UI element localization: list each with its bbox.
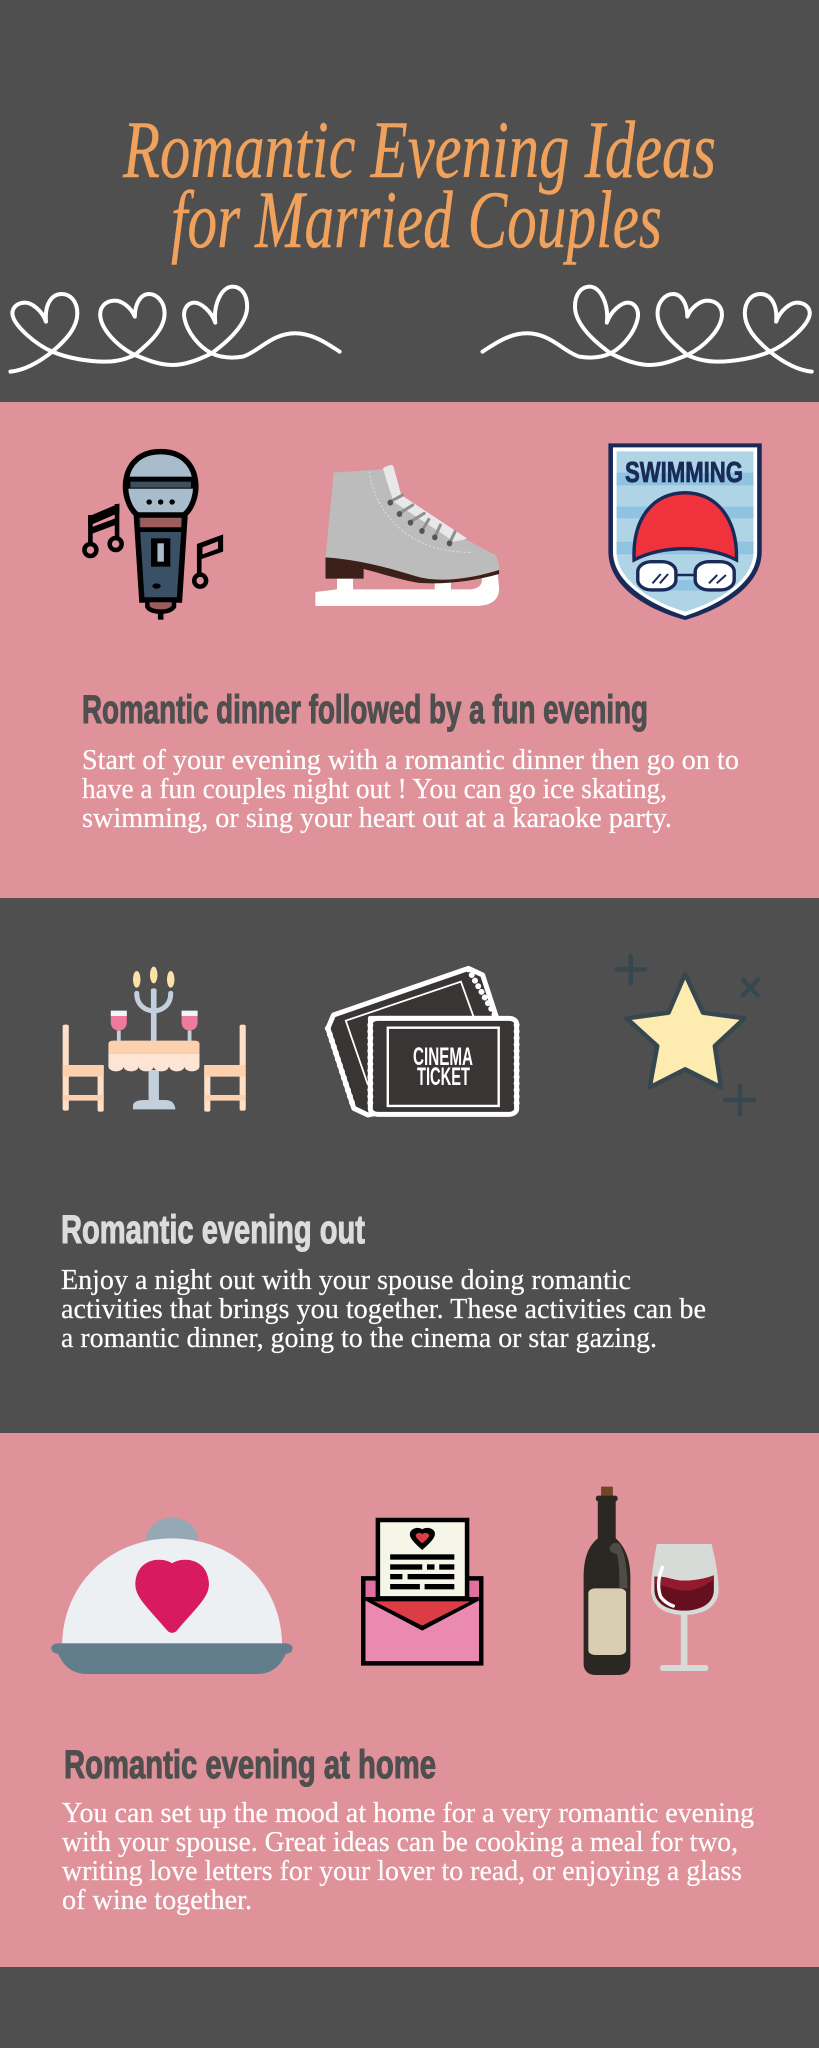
heading: section two: Romantic evening out xyxy=(61,1208,365,1252)
icon: cinema tickets: CINEMA xyxy=(413,1043,473,1071)
icon: serving cloche with heart xyxy=(51,1518,292,1674)
panel: pink band three xyxy=(0,1433,819,1967)
text block: section one: have a fun couples night out ! You can go ice skating, xyxy=(82,774,667,805)
text block: section two: a romantic dinner, going to the cinema or star gazing. xyxy=(61,1323,657,1354)
text block: section two xyxy=(61,1265,706,1354)
text block: section three: writing love letters for your lover to read, or enjoying a glass xyxy=(62,1856,742,1887)
icon: karaoke microphone xyxy=(84,452,223,620)
icon: swimming badge xyxy=(608,443,762,620)
text block: section one: swimming, or sing your heart out at a karaoke party. xyxy=(82,803,672,834)
text block: section three: with your spouse. Great ideas can be cooking a meal for two, xyxy=(62,1827,738,1858)
text block: section three: of wine together. xyxy=(62,1885,252,1916)
icon: ice skate xyxy=(315,465,499,606)
panel: pink band one xyxy=(0,402,819,898)
heading: section three: Romantic evening at home xyxy=(64,1743,436,1787)
icon: heart flourish left xyxy=(10,287,340,372)
text block: section two: Enjoy a night out with your spouse doing romantic xyxy=(61,1265,631,1296)
icon: star with sparkles xyxy=(617,956,758,1114)
text block: section two: activities that brings you together. These activities can be xyxy=(61,1294,706,1325)
icon: love letter envelope xyxy=(363,1520,481,1663)
text block: section one: Start of your evening with a romantic dinner then go on to xyxy=(82,745,739,776)
icon: cinema tickets: TICKET xyxy=(417,1063,470,1091)
icon: candlelit dinner table xyxy=(63,967,246,1112)
title xyxy=(122,104,716,265)
icon: wine bottle and glass xyxy=(584,1487,719,1675)
text block: section three: You can set up the mood at home for a very romantic evening xyxy=(62,1798,754,1829)
icon: swimming badge: SWIMMING xyxy=(625,457,743,489)
text block: section one xyxy=(82,745,739,834)
icon: heart flourish right xyxy=(483,287,812,372)
icon: cinema tickets xyxy=(328,968,517,1115)
text block: section three xyxy=(62,1798,754,1916)
